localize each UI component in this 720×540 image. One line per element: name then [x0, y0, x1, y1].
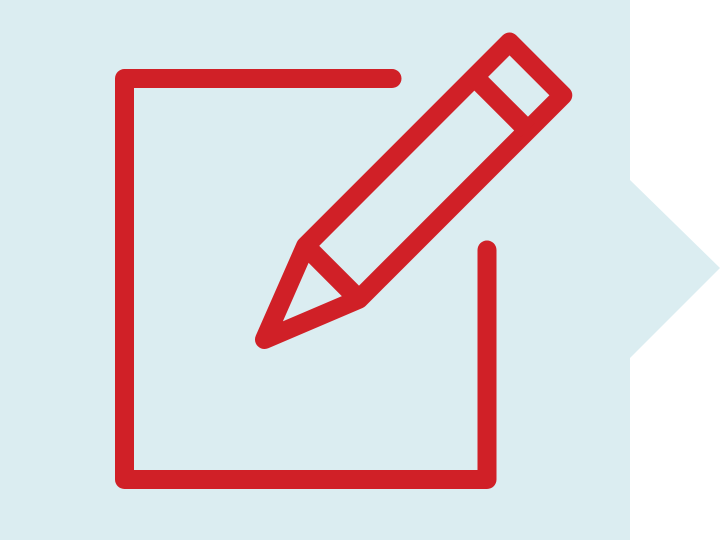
- icon: pencil: [264, 42, 563, 340]
- pencil outline: [264, 42, 563, 340]
- pencil tip divider: [306, 246, 359, 299]
- icon: open square document: [124, 78, 487, 480]
- pencil eraser divider: [474, 77, 528, 130]
